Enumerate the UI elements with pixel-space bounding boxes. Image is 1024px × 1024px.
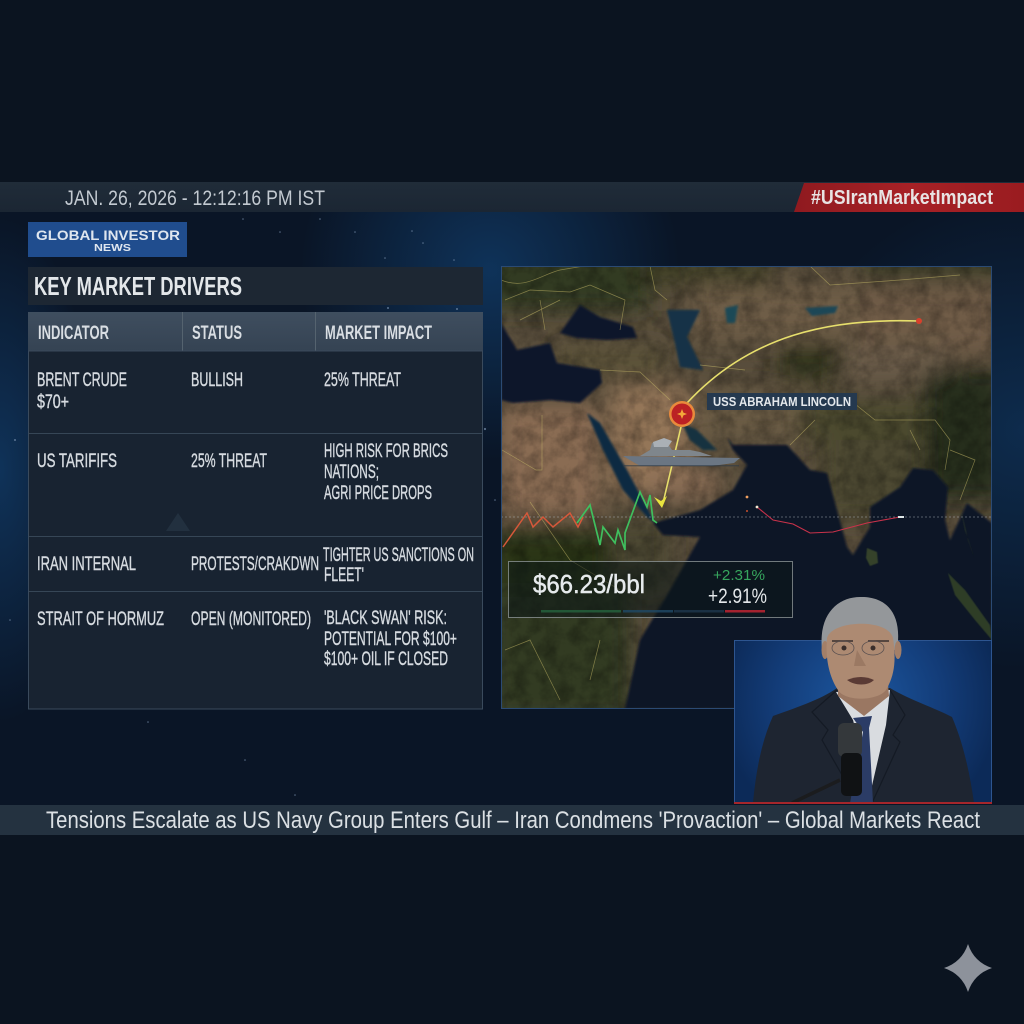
row: iran internal: PROTESTS/CRAKDWN	[191, 553, 319, 575]
chart line: green	[577, 492, 657, 550]
row: brent crude: BRENT CRUDE	[37, 369, 127, 391]
table header: MARKET IMPACT	[325, 322, 432, 344]
presenter: tie	[850, 716, 873, 803]
origin dot	[916, 318, 922, 324]
table header	[28, 312, 483, 351]
icon: ship	[623, 438, 740, 466]
texture	[501, 266, 992, 709]
border lines	[501, 265, 975, 700]
row: strait of hormuz: POTENTIAL FOR $100+	[324, 628, 457, 650]
logo: Global Investor News: NEWS	[94, 242, 131, 254]
heading	[28, 267, 483, 305]
change: white: +2.91%	[708, 585, 767, 608]
row: iran internal	[37, 544, 474, 586]
presenter: head	[822, 597, 902, 699]
row: us tariffs	[37, 440, 448, 504]
row: strait of hormuz: $100+ OIL IF CLOSED	[324, 648, 448, 670]
logo: Global Investor News	[28, 222, 187, 257]
route: red shipping line	[746, 496, 904, 533]
hashtag banner	[794, 183, 1024, 212]
presenter inset	[734, 597, 992, 804]
logo: Global Investor News: GLOBAL INVESTOR	[36, 228, 180, 243]
change: green: +2.31%	[713, 567, 765, 584]
seas	[501, 305, 992, 709]
heading: KEY MARKET DRIVERS	[34, 273, 242, 301]
price: $66.23/bbl	[533, 569, 645, 599]
table body	[28, 351, 482, 709]
panel: key market drivers	[28, 267, 483, 709]
presenter: neck	[838, 672, 889, 716]
label: USS Abraham Lincoln: USS ABRAHAM LINCOLN	[713, 394, 851, 409]
target marker	[669, 401, 695, 427]
table header: INDICATOR	[38, 322, 109, 344]
presenter: microphone	[792, 723, 862, 803]
row: us tariffs: HIGH RISK FOR BRICS	[324, 440, 448, 462]
date and time: JAN. 26, 2026 - 12:12:16 PM IST	[65, 187, 325, 210]
broadcast screen	[0, 182, 1024, 992]
row: brent crude: 25% THREAT	[324, 369, 401, 391]
arrow to gulf	[654, 427, 681, 508]
route arc	[687, 321, 918, 403]
map panel	[501, 266, 992, 709]
red base rule	[734, 802, 992, 804]
hashtag banner: #USIranMarketImpact	[811, 187, 993, 209]
row: iran internal: FLEET'	[324, 564, 364, 586]
row: brent crude	[37, 369, 401, 413]
row: us tariffs: US TARIFIFS	[37, 450, 117, 472]
row: iran internal: IRAN INTERNAL	[37, 553, 136, 575]
row: us tariffs: AGRI PRICE DROPS	[324, 482, 432, 504]
land base	[502, 267, 991, 708]
row: strait of hormuz	[37, 607, 457, 670]
ticker strip	[541, 610, 765, 612]
table header: STATUS	[192, 322, 242, 344]
price box	[508, 562, 792, 618]
chart line: red	[503, 513, 583, 547]
row: strait of hormuz: 'BLACK SWAN' RISK:	[324, 607, 447, 629]
dotted equator line	[502, 516, 991, 518]
icon: sparkle watermark	[944, 944, 992, 992]
presenter: lapels	[812, 690, 905, 803]
row: strait of hormuz: STRAIT OF HORMUZ	[37, 608, 164, 630]
row: iran internal: TIGHTER US SANCTIONS ON	[323, 544, 474, 566]
row: strait of hormuz: OPEN (MONITORED)	[191, 608, 311, 630]
presenter: suit	[753, 688, 974, 803]
row: brent crude: $70+	[37, 391, 69, 413]
islands and east coast land	[866, 518, 991, 639]
presenter: shirt	[836, 690, 890, 790]
row: us tariffs: 25% THREAT	[191, 450, 267, 472]
row: brent crude: BULLISH	[191, 369, 243, 391]
top status bar	[0, 182, 1024, 212]
row: us tariffs: NATIONS;	[324, 461, 379, 483]
